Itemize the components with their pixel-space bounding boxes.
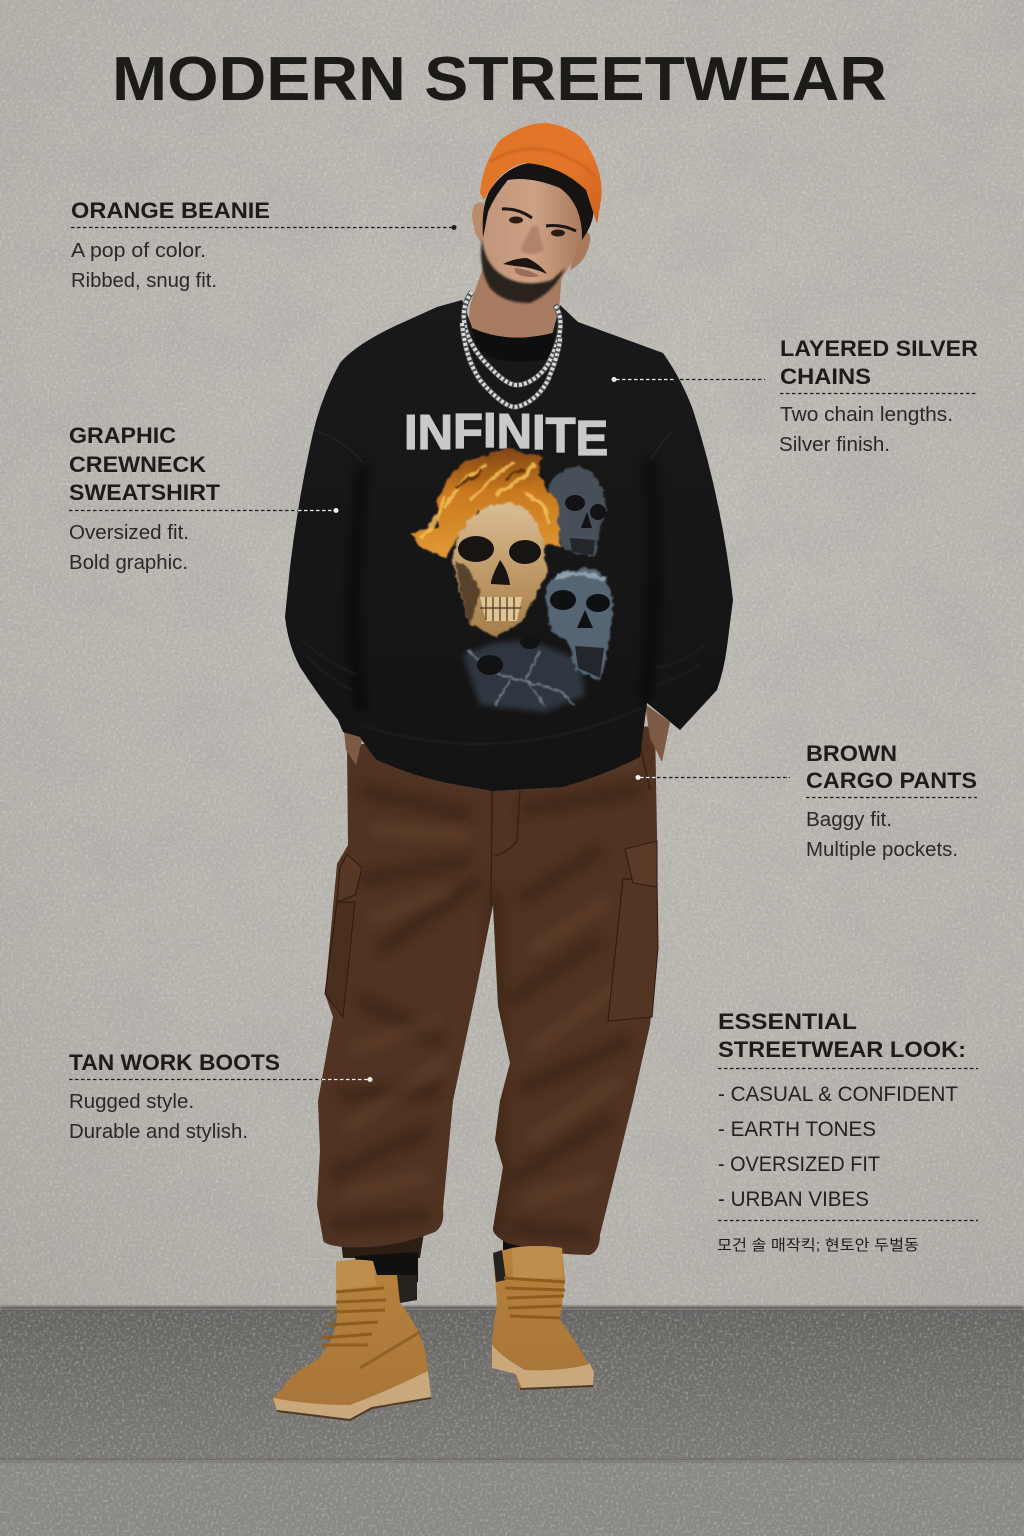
face bbox=[482, 172, 584, 303]
fly seam bbox=[491, 790, 520, 905]
grey skull top bbox=[547, 467, 606, 557]
heading: ORANGE BEANIE bbox=[71, 198, 270, 223]
callout: orange beanie bbox=[71, 198, 456, 292]
list: - EARTH TONES bbox=[718, 1118, 876, 1141]
eyes and brows bbox=[502, 209, 576, 236]
right boot bbox=[492, 1246, 594, 1389]
description bbox=[69, 1091, 248, 1143]
divider bbox=[780, 392, 978, 394]
description bbox=[806, 809, 958, 861]
description: Silver finish. bbox=[779, 434, 890, 456]
leader line bbox=[69, 508, 338, 513]
leader line bbox=[612, 377, 765, 382]
description: Ribbed, snug fit. bbox=[71, 270, 217, 292]
heading: TAN WORK BOOTS bbox=[69, 1050, 280, 1075]
cargo pocket right bbox=[608, 841, 658, 1021]
beard bbox=[481, 238, 565, 303]
callout: tan work boots bbox=[69, 1050, 372, 1143]
socks and ankle elastic bbox=[340, 1226, 565, 1282]
heading bbox=[69, 423, 221, 505]
leader line bbox=[71, 225, 456, 230]
divider bbox=[718, 1220, 978, 1222]
heading: SWEATSHIRT bbox=[69, 480, 221, 505]
smoky bottom skull bbox=[463, 635, 585, 712]
cargo pants bbox=[317, 726, 658, 1255]
lips bbox=[514, 268, 540, 277]
moustache bbox=[503, 258, 547, 274]
grey skull middle bbox=[545, 568, 613, 680]
left boot bbox=[273, 1260, 431, 1420]
heading bbox=[780, 336, 978, 389]
description bbox=[69, 522, 189, 574]
divider bbox=[718, 1068, 978, 1070]
description bbox=[71, 240, 217, 292]
hair bbox=[483, 162, 594, 240]
main skull bbox=[452, 503, 547, 637]
heading: LAYERED SILVER bbox=[780, 336, 978, 361]
description: Multiple pockets. bbox=[806, 839, 958, 861]
description: Baggy fit. bbox=[806, 809, 892, 831]
flames bbox=[413, 447, 560, 558]
heading: STREETWEAR LOOK: bbox=[718, 1037, 966, 1062]
heading: CREWNECK bbox=[69, 452, 206, 477]
heading bbox=[806, 741, 977, 793]
list bbox=[718, 1083, 958, 1211]
heading: ESSENTIAL bbox=[718, 1009, 857, 1034]
neck bbox=[468, 268, 562, 345]
description: Oversized fit. bbox=[69, 522, 189, 544]
sweatshirt graphic: INFINITE and skulls bbox=[404, 404, 613, 712]
description: Durable and stylish. bbox=[69, 1121, 248, 1143]
nose bbox=[520, 226, 544, 254]
heading bbox=[718, 1009, 966, 1062]
divider bbox=[806, 796, 977, 798]
callout: brown cargo pants bbox=[636, 741, 977, 861]
cargo pocket left bbox=[325, 854, 362, 1017]
ears bbox=[472, 202, 484, 243]
head and face bbox=[472, 123, 602, 303]
description: Bold graphic. bbox=[69, 552, 188, 574]
korean tagline: 모건 솔 매작킥; 현토안 두벌동 bbox=[717, 1237, 919, 1254]
heading: CHAINS bbox=[780, 364, 871, 389]
leader line bbox=[69, 1077, 372, 1082]
heading: CARGO PANTS bbox=[806, 768, 977, 793]
leader line bbox=[636, 775, 790, 780]
callout: layered silver chains bbox=[612, 336, 978, 456]
orange beanie bbox=[480, 123, 602, 224]
heading: BROWN bbox=[806, 741, 897, 766]
graphic crewneck sweatshirt bbox=[285, 300, 733, 791]
graphic wordmark: INFINITE bbox=[404, 404, 608, 466]
figure: man in streetwear outfit bbox=[273, 123, 733, 1420]
description: Two chain lengths. bbox=[780, 404, 953, 426]
hands in pockets bbox=[343, 704, 670, 765]
layered silver chains bbox=[462, 292, 560, 407]
panel: essential streetwear look bbox=[717, 1009, 978, 1254]
description: A pop of color. bbox=[71, 240, 206, 262]
title: MODERN STREETWEAR bbox=[112, 45, 887, 114]
inner black tee bbox=[472, 328, 556, 362]
callout: graphic crewneck sweatshirt bbox=[69, 423, 338, 574]
list: - CASUAL & CONFIDENT bbox=[718, 1083, 958, 1106]
list: - URBAN VIBES bbox=[718, 1188, 869, 1211]
list: - OVERSIZED FIT bbox=[718, 1153, 880, 1176]
heading: GRAPHIC bbox=[69, 423, 176, 448]
description: Rugged style. bbox=[69, 1091, 194, 1113]
description bbox=[779, 404, 953, 456]
